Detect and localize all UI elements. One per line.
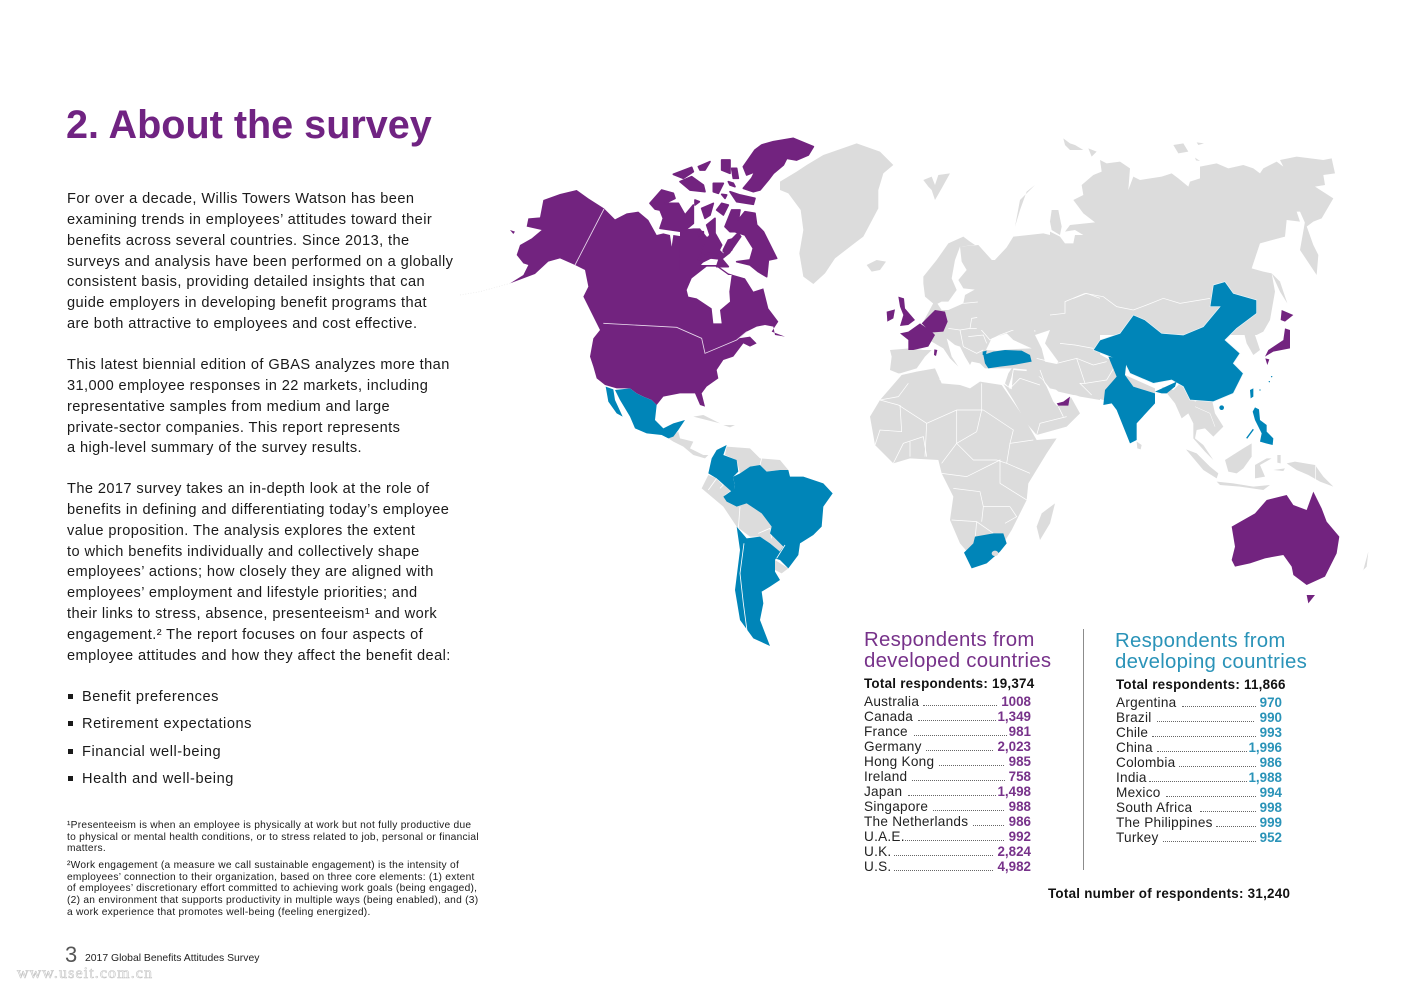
map: grey Europe, Middle East, North Africa: [890, 260, 1100, 435]
table: developed countries: 992: [1009, 829, 1031, 844]
table: developing countries: 998: [1260, 800, 1282, 815]
footnote 2: (2) an environment that supports productivity in multiple ways (being enabled), and (3): [67, 895, 478, 906]
Ireland: [887, 309, 895, 322]
table: developed countries: Hong Kong: [864, 754, 934, 769]
Hudson Bay: [687, 267, 732, 323]
Canada and United States: [510, 190, 785, 407]
map: grey Europe borders: [935, 260, 1100, 435]
intro paragraph 3: employees’ actions; how closely they are aligned with: [67, 564, 434, 580]
title: 2. About the survey: [66, 103, 432, 147]
table: developing countries: Colombia: [1116, 755, 1175, 770]
table: developed countries: U.A.E.: [864, 829, 905, 844]
map: The Philippines, Taiwan, Hainan: [1219, 376, 1273, 445]
table: developing countries: 999: [1260, 815, 1282, 830]
table: developing countries: 986: [1260, 755, 1282, 770]
Australia: [1232, 492, 1339, 585]
table: developing countries: 1,988: [1248, 770, 1282, 785]
table: developing countries: India: [1116, 770, 1147, 785]
table: developed countries: France: [864, 724, 908, 739]
intro paragraph 3: employees’ employment and lifestyle priorities; and: [67, 585, 418, 601]
table: developed countries: [864, 694, 1031, 874]
table: developed countries: The Netherlands: [864, 814, 968, 829]
India: [1103, 357, 1155, 443]
table: developed countries: Australia: [864, 694, 919, 709]
total: developed: Total respondents: 19,374: [864, 676, 1034, 691]
bullet list: [68, 689, 252, 787]
intro paragraph 3: benefits in defining and differentiating today’s employee: [67, 502, 449, 518]
France: [900, 323, 935, 350]
footnote 2: a work experience that promotes well-being (feeling energized).: [67, 907, 371, 918]
map: grey Southeast Asia and Oceania: [1162, 383, 1333, 490]
table: developing countries: China: [1116, 740, 1153, 755]
table: developed countries: 1,349: [997, 709, 1031, 724]
intro paragraph 1: surveys and analysis have been performed on a globally: [67, 254, 453, 270]
Japan: [1281, 310, 1293, 322]
map: New Zealand: [1353, 552, 1368, 580]
total: developing: Total respondents: 11,866: [1116, 677, 1286, 692]
intro paragraph 1: consistent basis, providing detailed insights that can: [67, 274, 425, 290]
page number: 3: [65, 942, 77, 967]
table: developing countries: Argentina: [1116, 695, 1176, 710]
map: developed countries, Europe and Middle East: [887, 297, 1070, 406]
footnote 1: to physical or mental health conditions, or to stress related to job, personal or financial: [67, 832, 479, 843]
table: developed countries: 1008: [1001, 694, 1031, 709]
map: developed countries, Asia-Pacific: [1232, 310, 1339, 603]
table: developed countries: Ireland: [864, 769, 907, 784]
table: developed countries: 2,023: [997, 739, 1031, 754]
table: developed countries: U.K.: [864, 844, 891, 859]
divider between tables: [1083, 629, 1084, 870]
table: developed countries: 981: [1009, 724, 1031, 739]
intro paragraph 3: their links to stress, absence, presenteeism¹ and work: [67, 606, 437, 622]
map: grey Americas and Greenland: [668, 143, 893, 573]
table: developed countries: Canada: [864, 709, 913, 724]
table: developing countries: Mexico: [1116, 785, 1161, 800]
table: developed countries: 986: [1009, 814, 1031, 829]
intro paragraph 1: benefits across several countries. Since 2013, the: [67, 233, 410, 249]
table: developing countries: 990: [1260, 710, 1282, 725]
table: developed countries: U.S.: [864, 859, 891, 874]
footnote 1: matters.: [67, 843, 106, 854]
table: developed countries: Singapore: [864, 799, 928, 814]
U.K.: [898, 297, 915, 326]
map: Canadian Arctic islands: [650, 138, 813, 277]
table: developing countries: 1,996: [1248, 740, 1282, 755]
footnote 2: ²Work engagement (a measure we call sustainable engagement) is the intensity of: [67, 860, 459, 871]
watermark: www.useit.com.cn: [17, 965, 153, 982]
footnote 1: [67, 820, 479, 854]
map: grey Siberia and East Asia: [1050, 138, 1335, 335]
bullet list: Benefit preferences: [82, 689, 219, 705]
intro paragraph 1: [67, 191, 453, 332]
intro paragraph 3: [67, 481, 451, 664]
footer title: 2017 Global Benefits Attitudes Survey: [85, 953, 259, 964]
grand total: Total number of respondents: 31,240: [1048, 886, 1290, 901]
table: developing countries: Brazil: [1116, 710, 1152, 725]
intro paragraph 2: [67, 357, 450, 456]
China: [1093, 282, 1257, 402]
map: Turkey: [983, 350, 1032, 368]
intro paragraph 3: to which benefits individually and collectively shape: [67, 544, 420, 560]
Mexico: [615, 388, 685, 438]
table: developed countries: Japan: [864, 784, 902, 799]
table: developing countries: Turkey: [1116, 830, 1159, 845]
country borders: [575, 209, 604, 265]
heading: developed countries: Respondents from: [864, 629, 1035, 651]
table: developing countries: 970: [1260, 695, 1282, 710]
table: developed countries: 985: [1009, 754, 1031, 769]
intro paragraph 3: employee attitudes and how they affect the benefit deal:: [67, 648, 451, 664]
intro paragraph 2: private-sector companies. This report represents: [67, 420, 400, 436]
map: grey Iran, Pakistan, Central Asia: [986, 330, 1120, 402]
Germany and The Netherlands: [922, 310, 948, 333]
heading: developed countries: developed countries: [864, 650, 1051, 672]
intro paragraph 3: engagement.² The report focuses on four aspects of: [67, 627, 423, 643]
intro paragraph 1: examining trends in employees’ attitudes toward their: [67, 212, 432, 228]
footnote 2: [67, 860, 478, 918]
heading: developing countries: Respondents from: [1115, 630, 1286, 652]
map: developed countries, North America: [460, 190, 785, 407]
table: developing countries: South Africa: [1116, 800, 1192, 815]
Argentina and Chile: [735, 527, 780, 646]
intro paragraph 2: This latest biennial edition of GBAS analyzes more than: [67, 357, 450, 373]
heading: developing countries: [1115, 630, 1307, 673]
intro paragraph 3: The 2017 survey takes an in-depth look at the role of: [67, 481, 429, 497]
table: developed countries: Germany: [864, 739, 922, 754]
map: grey Scandinavia, northern Russia, Africa: [870, 173, 1260, 555]
table: developing countries: 952: [1260, 830, 1282, 845]
table: developing countries: Chile: [1116, 725, 1148, 740]
bullet list: Health and well-being: [82, 771, 234, 787]
bullet list: Retirement expectations: [82, 716, 252, 732]
intro paragraph 2: a high-level summary of the survey results.: [67, 440, 362, 456]
table: developed countries: 2,824: [997, 844, 1031, 859]
map: developing countries, Asia and Africa: [964, 282, 1257, 568]
intro paragraph 3: value proposition. The analysis explores the extent: [67, 523, 415, 539]
intro paragraph 1: guide employers in developing benefit programs that: [67, 295, 427, 311]
table: developed countries: 758: [1009, 769, 1031, 784]
table: developing countries: The Philippines: [1116, 815, 1213, 830]
table: developing countries: [1116, 695, 1282, 845]
table: developed countries: 4,982: [997, 859, 1031, 874]
heading: developed countries: [864, 629, 1051, 672]
footnote 2: of employees’ discretionary effort committed to achieving work goals (being engaged),: [67, 883, 477, 894]
heading: developing countries: developing countries: [1115, 651, 1307, 673]
table: developing countries: 994: [1260, 785, 1282, 800]
footnote 1: ¹Presenteeism is when an employee is physically at work but not fully productive due: [67, 820, 471, 831]
U.A.E.: [1057, 397, 1070, 406]
Brazil: [723, 465, 833, 568]
South Africa: [964, 533, 1007, 568]
Colombia: [708, 445, 738, 492]
intro paragraph 1: For over a decade, Willis Towers Watson has been: [67, 191, 414, 207]
intro paragraph 2: 31,000 employee responses in 22 markets, including: [67, 378, 428, 394]
table: developing countries: 993: [1260, 725, 1282, 740]
Black Sea: [986, 333, 1032, 351]
map: developing countries, Americas: [606, 387, 833, 646]
bullet list: Financial well-being: [82, 744, 221, 760]
footnote 2: employees’ connection to their organization, based on three core elements: (1) extent: [67, 872, 475, 883]
Northern Canada mainland: [680, 228, 742, 270]
table: developed countries: 988: [1009, 799, 1031, 814]
Caspian Sea: [1035, 330, 1058, 364]
intro paragraph 2: representative samples from medium and large: [67, 399, 390, 415]
table: developed countries: 1,498: [997, 784, 1031, 799]
intro paragraph 1: are both attractive to employees and cost effective.: [67, 316, 417, 332]
